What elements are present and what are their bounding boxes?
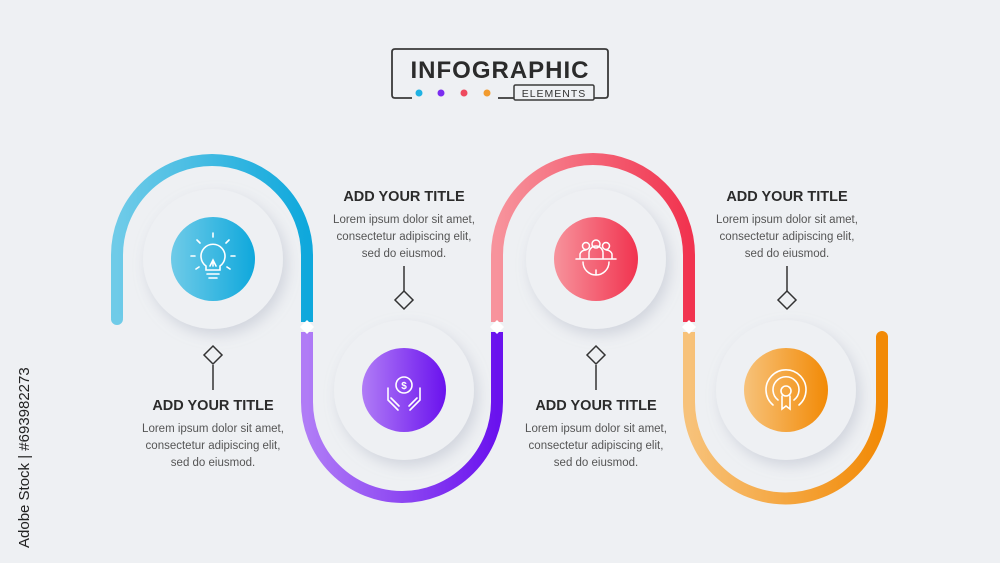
title box: INFOGRAPHIC	[410, 57, 590, 84]
text 2: ADD YOUR TITLE	[343, 189, 465, 205]
step 2	[334, 320, 474, 460]
step 3	[526, 189, 666, 329]
text 1: consectetur adipiscing elit,	[146, 440, 280, 452]
title box	[392, 49, 608, 100]
text 3: consectetur adipiscing elit,	[529, 440, 663, 452]
text 1	[142, 346, 284, 469]
text 1: sed do eiusmod.	[171, 457, 255, 469]
text 2: consectetur adipiscing elit,	[337, 231, 471, 243]
watermark id: Adobe Stock | #693982273	[16, 367, 33, 548]
text 2: sed do eiusmod.	[362, 248, 446, 260]
path segments	[117, 159, 882, 498]
text 2	[333, 189, 475, 309]
icon: target badge	[766, 370, 806, 409]
title box: ELEMENTS	[522, 88, 586, 100]
text 3	[525, 346, 667, 469]
step 1	[143, 189, 283, 329]
text 4: consectetur adipiscing elit,	[720, 231, 854, 243]
text 1: Lorem ipsum dolor sit amet,	[142, 423, 284, 435]
step 4	[716, 320, 856, 460]
step 2: $	[401, 381, 407, 392]
icon: bulb	[191, 233, 235, 278]
cap: orange end	[876, 331, 888, 343]
text 1: ADD YOUR TITLE	[152, 398, 274, 414]
icon: money hands	[388, 377, 420, 410]
text 3: ADD YOUR TITLE	[535, 398, 657, 414]
text 4: sed do eiusmod.	[745, 248, 829, 260]
text 4: Lorem ipsum dolor sit amet,	[716, 214, 858, 226]
junction diamonds	[300, 320, 696, 334]
icon: team gear	[576, 240, 616, 275]
text 3: Lorem ipsum dolor sit amet,	[525, 423, 667, 435]
text 4	[716, 189, 858, 309]
cap: blue start	[111, 313, 123, 325]
text 3: sed do eiusmod.	[554, 457, 638, 469]
text 4: ADD YOUR TITLE	[726, 189, 848, 205]
text 2: Lorem ipsum dolor sit amet,	[333, 214, 475, 226]
